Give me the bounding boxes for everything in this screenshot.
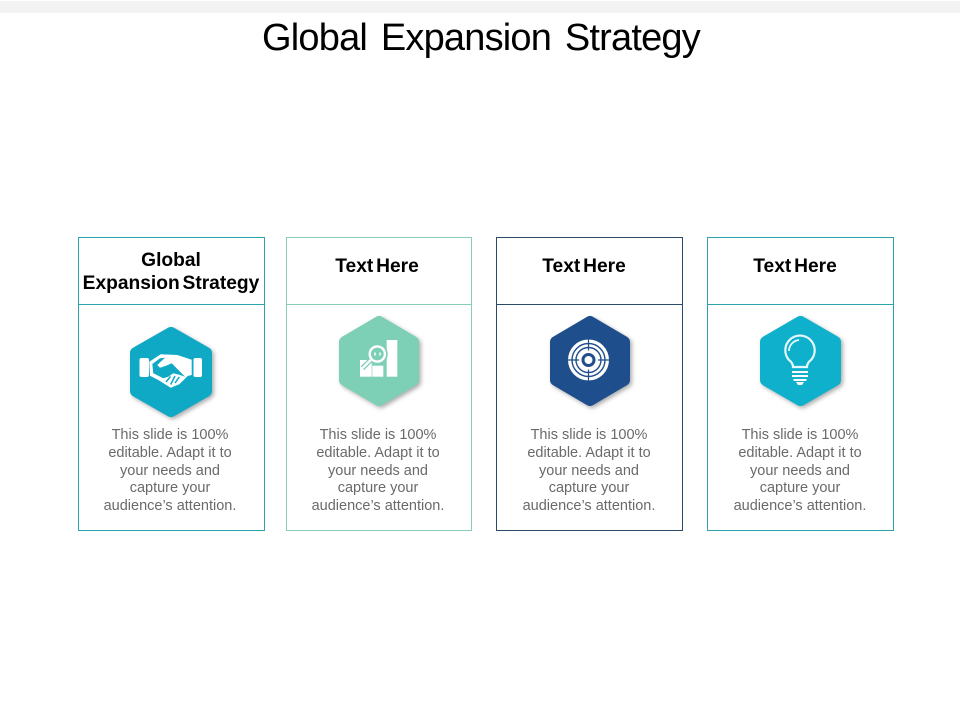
text block 2: your needs and — [328, 463, 428, 479]
text block 4: editable. Adapt it to — [738, 445, 862, 461]
heading 1: Global — [141, 250, 201, 271]
text block 1 — [104, 427, 236, 514]
text block 2: capture your — [338, 480, 418, 496]
text block 1: This slide is 100% — [112, 427, 228, 443]
heading 1: Expansion Strategy — [83, 273, 259, 294]
text block 3 — [523, 427, 655, 514]
text block 4: audience’s attention. — [734, 498, 866, 514]
text block 4: your needs and — [750, 463, 850, 479]
heading 2: Text Here — [335, 256, 419, 277]
text block 3: editable. Adapt it to — [527, 445, 651, 461]
text block 3: This slide is 100% — [531, 427, 647, 443]
text block 4: This slide is 100% — [742, 427, 858, 443]
text block 2: This slide is 100% — [320, 427, 436, 443]
text block 1: audience’s attention. — [104, 498, 236, 514]
icon: target hexagon — [550, 316, 634, 410]
top grey band — [0, 1, 960, 13]
text block 1: your needs and — [120, 463, 220, 479]
heading 1 — [83, 250, 260, 294]
text block 3: capture your — [549, 480, 629, 496]
panel: global expansion strategy — [78, 237, 265, 531]
icon: chart and magnifier hexagon — [338, 316, 424, 410]
text block 3: your needs and — [539, 463, 639, 479]
heading 3: Text Here — [542, 256, 626, 277]
text block 1: capture your — [130, 480, 210, 496]
text block 2 — [312, 427, 444, 514]
text block 4: capture your — [760, 480, 840, 496]
text block 4 — [734, 427, 866, 514]
icon: handshake hexagon — [130, 326, 216, 422]
panel: text here 4 — [707, 237, 894, 531]
text block 1: editable. Adapt it to — [108, 445, 232, 461]
text block 2: audience’s attention. — [312, 498, 444, 514]
panel: text here 2 — [286, 237, 472, 531]
panel: text here 3 — [496, 237, 683, 531]
title: Global Expansion Strategy — [262, 17, 700, 59]
heading 4: Text Here — [753, 256, 837, 277]
text block 2: editable. Adapt it to — [316, 445, 440, 461]
text block 3: audience’s attention. — [523, 498, 655, 514]
icon: light bulb hexagon — [760, 316, 846, 410]
